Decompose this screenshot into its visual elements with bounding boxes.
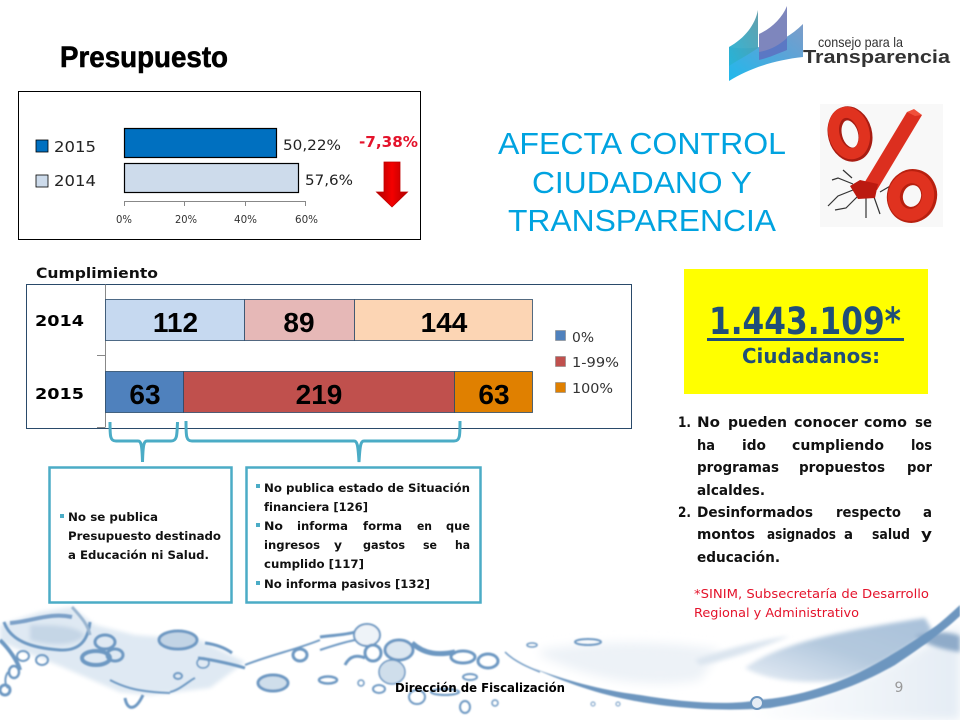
legend 2015: 2015 [54, 138, 96, 156]
text block: consequences list: montos [697, 527, 755, 543]
panel: citizens count: Ciudadanos: [742, 344, 880, 368]
text block: consequences list: respecto [836, 505, 901, 521]
logo text: consejo para la [818, 34, 903, 50]
page number: 9 [895, 680, 903, 696]
callout: unreported items: No informa pasivos [132] [264, 577, 430, 591]
text block: consequences list: asignados [767, 527, 836, 543]
callout: unreported items: que [446, 519, 470, 533]
text block: consequences list: 1. [678, 415, 691, 431]
text block: consequences list: ha [697, 438, 715, 454]
brace: partial group [186, 421, 460, 462]
text block: consequences list: educación. [697, 550, 780, 566]
callout: unreported items [246, 468, 480, 602]
row 2014 [35, 300, 532, 340]
callout: unreported items: gastos [363, 538, 405, 552]
x axis: 40% [234, 214, 257, 226]
text block: consequences list: ido [742, 438, 766, 454]
row 2014: 89 [283, 307, 315, 338]
text block: consequences list: programas [697, 460, 779, 476]
legend 2014 [36, 172, 96, 190]
icon: red down arrow [376, 162, 408, 207]
x axis: 20% [175, 214, 197, 226]
row 2015: 219 [296, 379, 342, 410]
brace: 0 percent group [110, 422, 178, 462]
x axis: 60% [295, 214, 318, 226]
heading: afecta control [498, 126, 786, 238]
logo text: Transparencia [803, 47, 951, 67]
legend: 0% [572, 330, 594, 346]
row 2014: 144 [421, 307, 468, 338]
x axis [116, 202, 318, 226]
x axis: 0% [116, 214, 132, 226]
row 2015: 63 [478, 379, 510, 410]
text block: consequences list: cumpliendo [792, 438, 884, 454]
callout: no budget published: Presupuesto destinado [68, 529, 221, 543]
text block: consequences list: pueden [728, 415, 787, 431]
text block: consequences list: como [864, 415, 907, 431]
text block: consequences list: conocer [794, 415, 858, 431]
text block: consequences list: No [697, 415, 720, 431]
footer: Dirección de Fiscalización [395, 680, 565, 695]
change label: -7,38% [359, 133, 418, 151]
panel: compliance stacked bar chart [26, 284, 632, 428]
panel: citizens count [684, 269, 928, 394]
callout: unreported items: ingresos [264, 538, 320, 552]
panel: citizens count: 1.443.109* [709, 300, 901, 343]
text block: consequences list: Desinformados [697, 505, 813, 521]
row 2015 [35, 372, 532, 412]
callout: no budget published [50, 468, 232, 602]
heading: afecta control: CIUDADANO Y [532, 165, 752, 200]
text block: consequences list: a [844, 527, 853, 543]
text block: consequences list: salud [872, 527, 910, 543]
legend: 100% [572, 381, 613, 397]
legend [556, 330, 619, 397]
source note: Regional y Administrativo [694, 605, 859, 620]
label: cumplimiento: Cumplimiento [36, 266, 158, 282]
text block: consequences list: 2. [678, 505, 691, 521]
callout: unreported items: ha [455, 538, 470, 552]
logo: consejo para la Transparencia [729, 6, 951, 81]
callout: unreported items: forma [363, 519, 402, 533]
legend 2014: 2014 [54, 172, 96, 190]
callout: unreported items: No publica estado de Situación [264, 481, 470, 495]
bar 2015 [124, 128, 276, 158]
row 2015: 63 [129, 379, 161, 410]
icon: red percent sign [820, 104, 943, 227]
callout: unreported items: cumplido [117] [264, 557, 364, 571]
callout: unreported items: No [264, 519, 283, 533]
row 2015: 2015 [35, 385, 84, 403]
heading: afecta control: AFECTA CONTROL [498, 126, 786, 161]
callout: unreported items: en [417, 519, 432, 533]
water splash background [0, 605, 960, 720]
bar 2014 [124, 164, 298, 192]
callout: unreported items: informa [297, 519, 348, 533]
text block: consequences list: y [921, 527, 932, 543]
text block: consequences list: alcaldes. [697, 483, 765, 499]
logo mark [729, 6, 803, 81]
text block: consequences list: por [907, 460, 932, 476]
callout: unreported items: financiera [126] [264, 500, 368, 514]
value 50,22%: 50,22% [283, 138, 341, 154]
callout: unreported items: y [334, 538, 343, 552]
text block: consequences list: propuestos [799, 460, 885, 476]
callout: no budget published: a Educación ni Salud. [68, 548, 209, 562]
text block: consequences list: se [915, 415, 932, 431]
panel: budget bar chart [18, 92, 420, 240]
callout: no budget published: No se publica [68, 510, 158, 524]
text block: consequences list [678, 415, 932, 566]
callout: unreported items: se [423, 538, 437, 552]
logo text [803, 34, 951, 67]
row 2014: 2014 [35, 312, 84, 330]
source note [694, 586, 929, 620]
source note: *SINIM, Subsecretaría de Desarrollo [694, 586, 929, 601]
legend: 1-99% [572, 355, 619, 371]
row 2014: 112 [153, 307, 198, 338]
heading: afecta control: TRANSPARENCIA [508, 203, 776, 238]
text block: consequences list: los [911, 438, 932, 454]
value 57,6%: 57,6% [305, 173, 353, 189]
legend 2015 [36, 138, 96, 156]
text block: consequences list: a [923, 505, 932, 521]
title: Presupuesto [60, 41, 228, 74]
